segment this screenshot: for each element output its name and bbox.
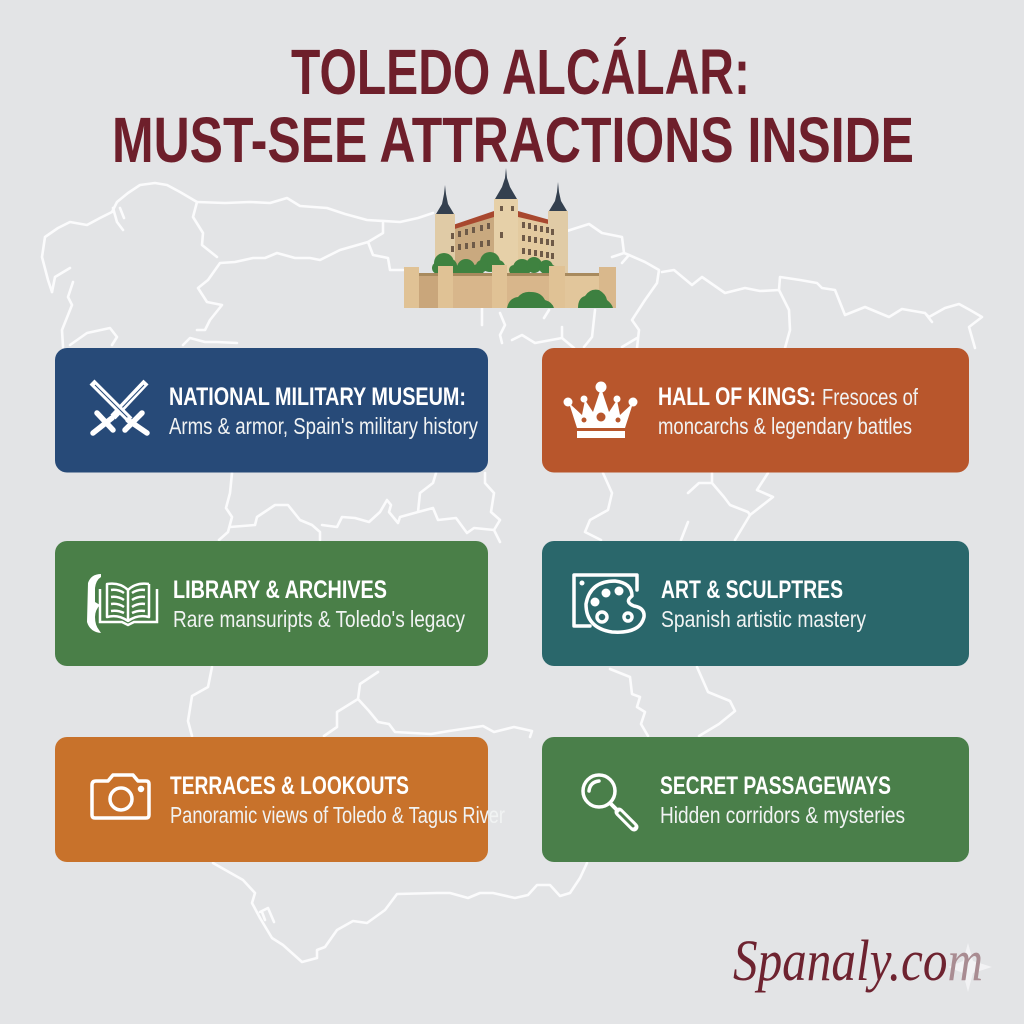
heading: TERRACES & LOOKOUTS [170, 772, 409, 800]
heading: NATIONAL MILITARY MUSEUM: [169, 383, 466, 411]
logo: Spanaly.com: Spanaly.com [733, 928, 983, 993]
panel: art and sculptures [542, 541, 969, 666]
panel: national military museum [55, 348, 488, 472]
description: Panoramic views of Toledo & Tagus River [170, 802, 505, 828]
icon: crown [564, 382, 638, 438]
description: Rare mansuripts & Toledo's legacy [173, 606, 465, 632]
heading and description: HALL OF KINGS: [658, 383, 816, 411]
heading: SECRET PASSAGEWAYS [660, 772, 891, 800]
panel: secret passageways [542, 737, 969, 862]
icon: crossed swords [92, 382, 147, 433]
heading: ART & SCULPTRES [661, 576, 843, 604]
icon: open book [87, 574, 157, 633]
icon: magnifying glass [583, 775, 634, 827]
map of Spain outline [42, 183, 982, 962]
icon: palette on canvas [574, 575, 644, 632]
panel: hall of kings: moncarchs & legendary battles [658, 413, 912, 439]
panel: hall of kings: Fresoces of [822, 384, 918, 410]
description: Arms & armor, Spain's military history [169, 413, 478, 439]
panel: terraces and lookouts [55, 737, 505, 862]
description: Hidden corridors & mysteries [660, 802, 905, 828]
title [112, 36, 914, 176]
icon: camera [92, 775, 149, 818]
watermark sparkle [948, 943, 992, 992]
panel: library and archives [55, 541, 488, 666]
illustration: Alcázar castle [404, 168, 616, 308]
panel: hall of kings [542, 348, 969, 472]
title: TOLEDO ALCÁLAR: [291, 36, 750, 108]
description: Spanish artistic mastery [661, 606, 866, 632]
heading: LIBRARY & ARCHIVES [173, 576, 387, 604]
